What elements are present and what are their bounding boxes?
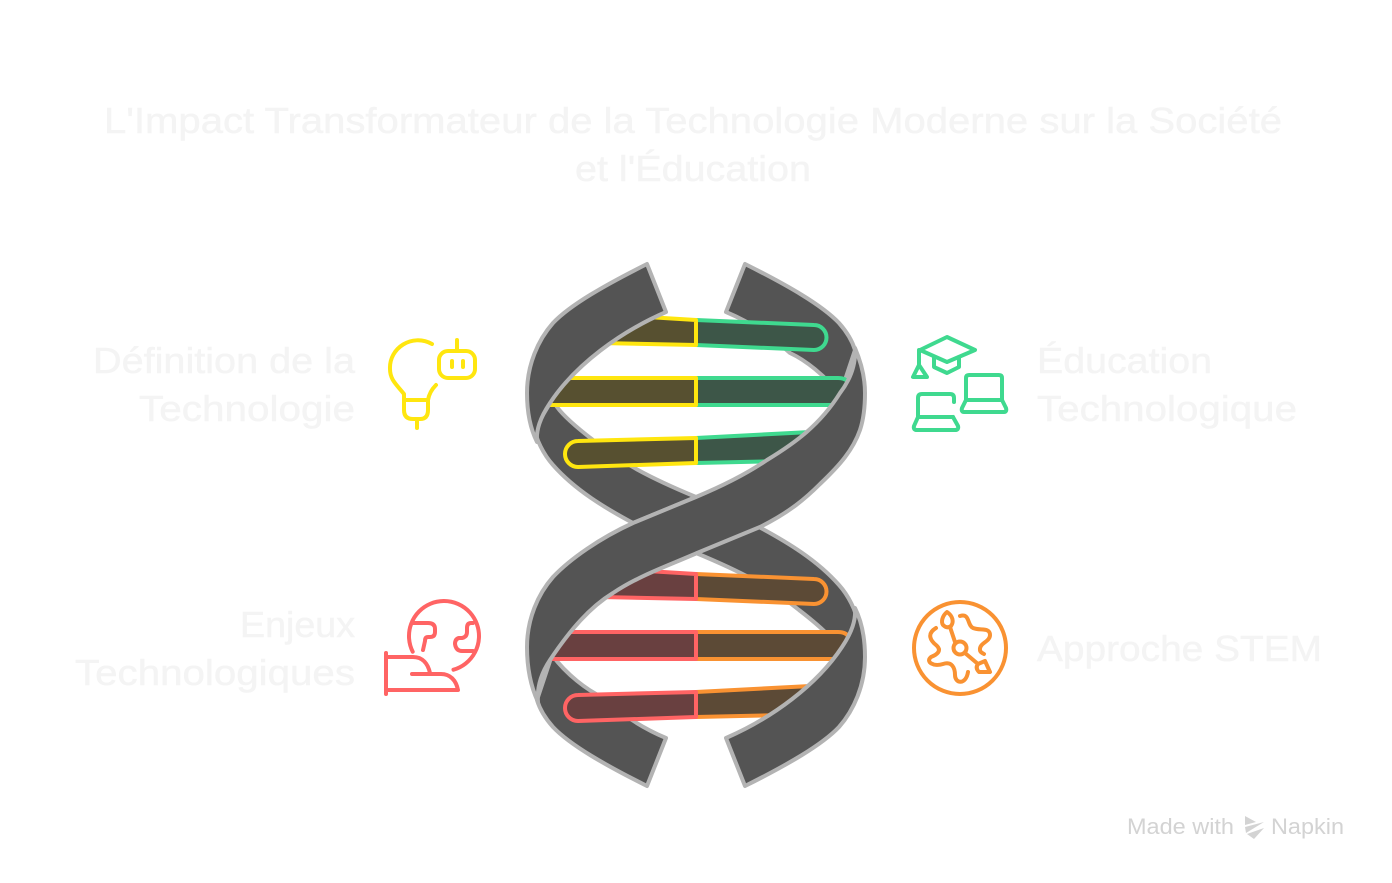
watermark: Made with Napkin xyxy=(1127,814,1344,839)
front strand: central S band xyxy=(527,348,865,702)
rungs: bottom group, red side xyxy=(540,570,696,721)
watermark: Made with Napkin: Made with xyxy=(1127,814,1234,839)
title: et l'Éducation xyxy=(575,148,811,189)
title: L'Impact Transformateur de la Technologie Moderne sur la Société xyxy=(104,100,1282,141)
label: Approche STEM: Approche STEM xyxy=(1037,628,1322,669)
back strand: upper middle xyxy=(535,400,696,523)
label: Éducation Technologique: Éducation xyxy=(1037,340,1212,381)
rungs: top group, green side xyxy=(696,320,850,463)
label: Définition de la Technologie: Définition de la xyxy=(93,340,356,381)
icon: STEM circle with tools xyxy=(914,602,1006,694)
back strand: top right xyxy=(726,264,855,395)
label: Définition de la Technologie: Technologie xyxy=(139,388,355,429)
DNA helix diagram xyxy=(527,264,865,786)
watermark: Made with Napkin: Napkin xyxy=(1271,814,1344,839)
back strand: lower middle xyxy=(696,527,857,650)
rungs: bottom group, orange side xyxy=(696,574,850,717)
icon: Napkin logo xyxy=(1245,816,1264,839)
back strand: bottom left xyxy=(537,655,666,786)
title xyxy=(104,100,1282,189)
label: Enjeux Technologiques xyxy=(75,604,355,693)
front strand: bottom right xyxy=(726,608,865,786)
front strand: top left xyxy=(527,264,666,442)
icon: globe and hand xyxy=(386,601,479,694)
label: Enjeux Technologiques: Technologiques xyxy=(75,652,355,693)
label: Enjeux Technologiques: Enjeux xyxy=(240,604,355,645)
label: Éducation Technologique xyxy=(1037,340,1297,429)
rungs: top group, yellow side xyxy=(540,316,696,467)
icon: graduation cap and laptops xyxy=(913,337,1006,430)
icon: light bulb and robot xyxy=(390,340,475,428)
label: Éducation Technologique: Technologique xyxy=(1037,388,1297,429)
label: Définition de la Technologie xyxy=(93,340,356,429)
